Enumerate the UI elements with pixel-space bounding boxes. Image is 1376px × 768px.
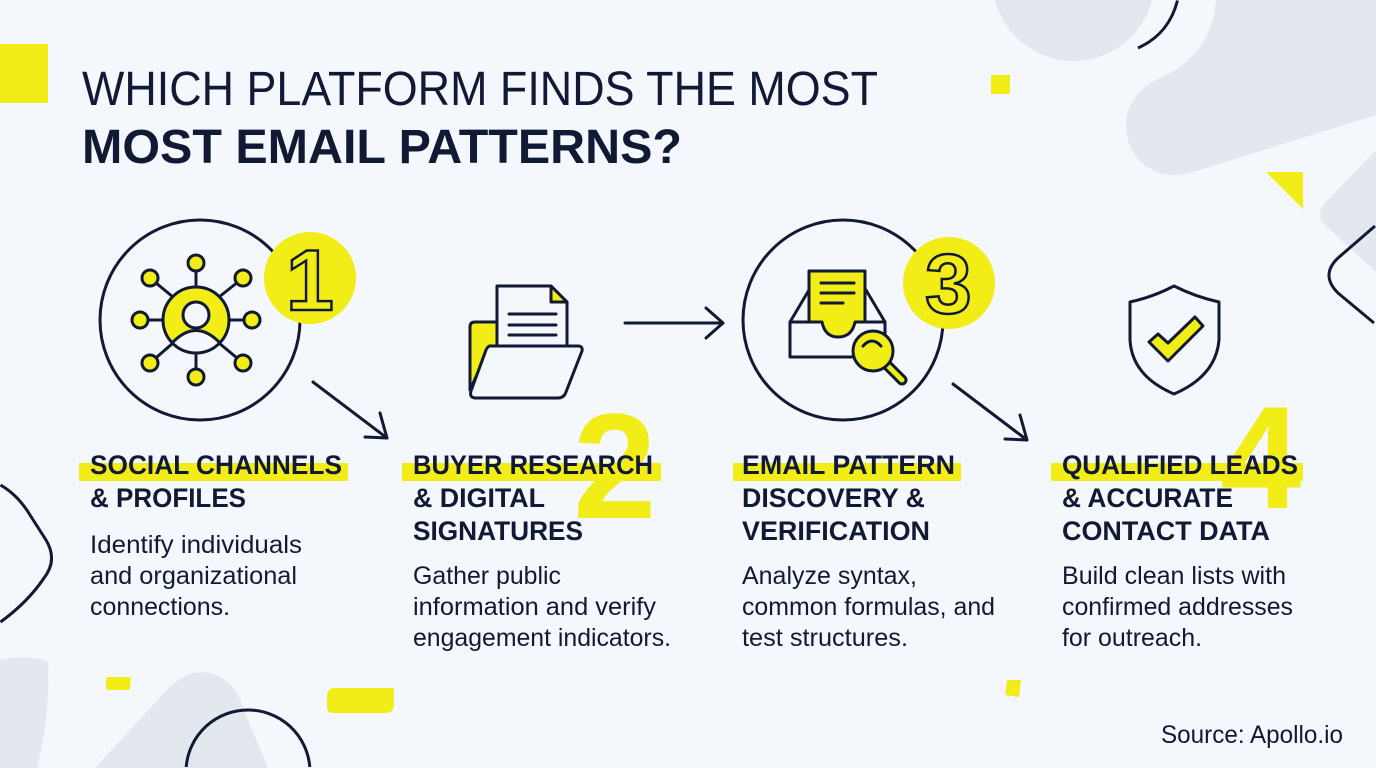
step 2 icon: folder with document [470, 286, 582, 398]
step 1 icon: social network in circle with badge [100, 220, 356, 420]
step 2 text with large numeral: Gather public [413, 562, 561, 590]
step 4 icon: shield with check [1130, 286, 1219, 394]
step 2 text with large numeral: & DIGITAL [413, 483, 545, 513]
step 1 text: & PROFILES [90, 483, 246, 513]
step 1 icon: social network in circle with badge: 1 [286, 233, 334, 329]
step 3 text: test structures. [742, 624, 908, 652]
step 3 text: common formulas, and [742, 593, 995, 621]
step 1 text: SOCIAL CHANNELS [90, 450, 342, 480]
source note: Source: Apollo.io [1161, 721, 1343, 749]
title: WHICH PLATFORM FINDS THE MOST [82, 63, 878, 116]
step 1 text: and organizational [90, 562, 297, 590]
arrow: step 2 to step 3 [625, 308, 723, 338]
step 2 text with large numeral [402, 382, 671, 652]
arrow: step 1 to step 2 [313, 382, 387, 438]
step 2 text with large numeral: 2 [573, 382, 656, 550]
step 2 text with large numeral: BUYER RESEARCH [413, 450, 653, 480]
step 3 text: Analyze syntax, [742, 562, 917, 590]
step 4 text with large numeral: 4 [1220, 376, 1301, 539]
step 3 text: EMAIL PATTERN [742, 450, 955, 480]
step 4 text with large numeral: & ACCURATE [1062, 483, 1233, 513]
title: MOST EMAIL PATTERNS? [82, 121, 682, 174]
step 3 text: DISCOVERY & [742, 483, 925, 513]
step 4 text with large numeral: Build clean lists with [1062, 562, 1286, 590]
step 3 text [733, 450, 995, 652]
step 3 icon: inbox with magnifier in circle with badge [743, 220, 995, 420]
step 4 text with large numeral: for outreach. [1062, 624, 1202, 652]
step 4 text with large numeral: confirmed addresses [1062, 593, 1293, 621]
step 2 text with large numeral: information and verify [413, 593, 656, 621]
title [82, 63, 878, 174]
step 1 text: Identify individuals [90, 531, 302, 559]
step 4 text with large numeral: QUALIFIED LEADS [1062, 450, 1298, 480]
step 1 text: connections. [90, 593, 230, 621]
step 4 text with large numeral: CONTACT DATA [1062, 516, 1270, 546]
step 2 text with large numeral: engagement indicators. [413, 624, 671, 652]
step 3 icon: inbox with magnifier in circle with badge: 3 [925, 237, 972, 331]
step 4 text with large numeral [1051, 376, 1303, 652]
arrow: step 3 to step 4 [953, 384, 1027, 440]
step 3 text: VERIFICATION [742, 516, 930, 546]
step 2 text with large numeral: SIGNATURES [413, 516, 583, 546]
step 1 text [79, 450, 348, 621]
